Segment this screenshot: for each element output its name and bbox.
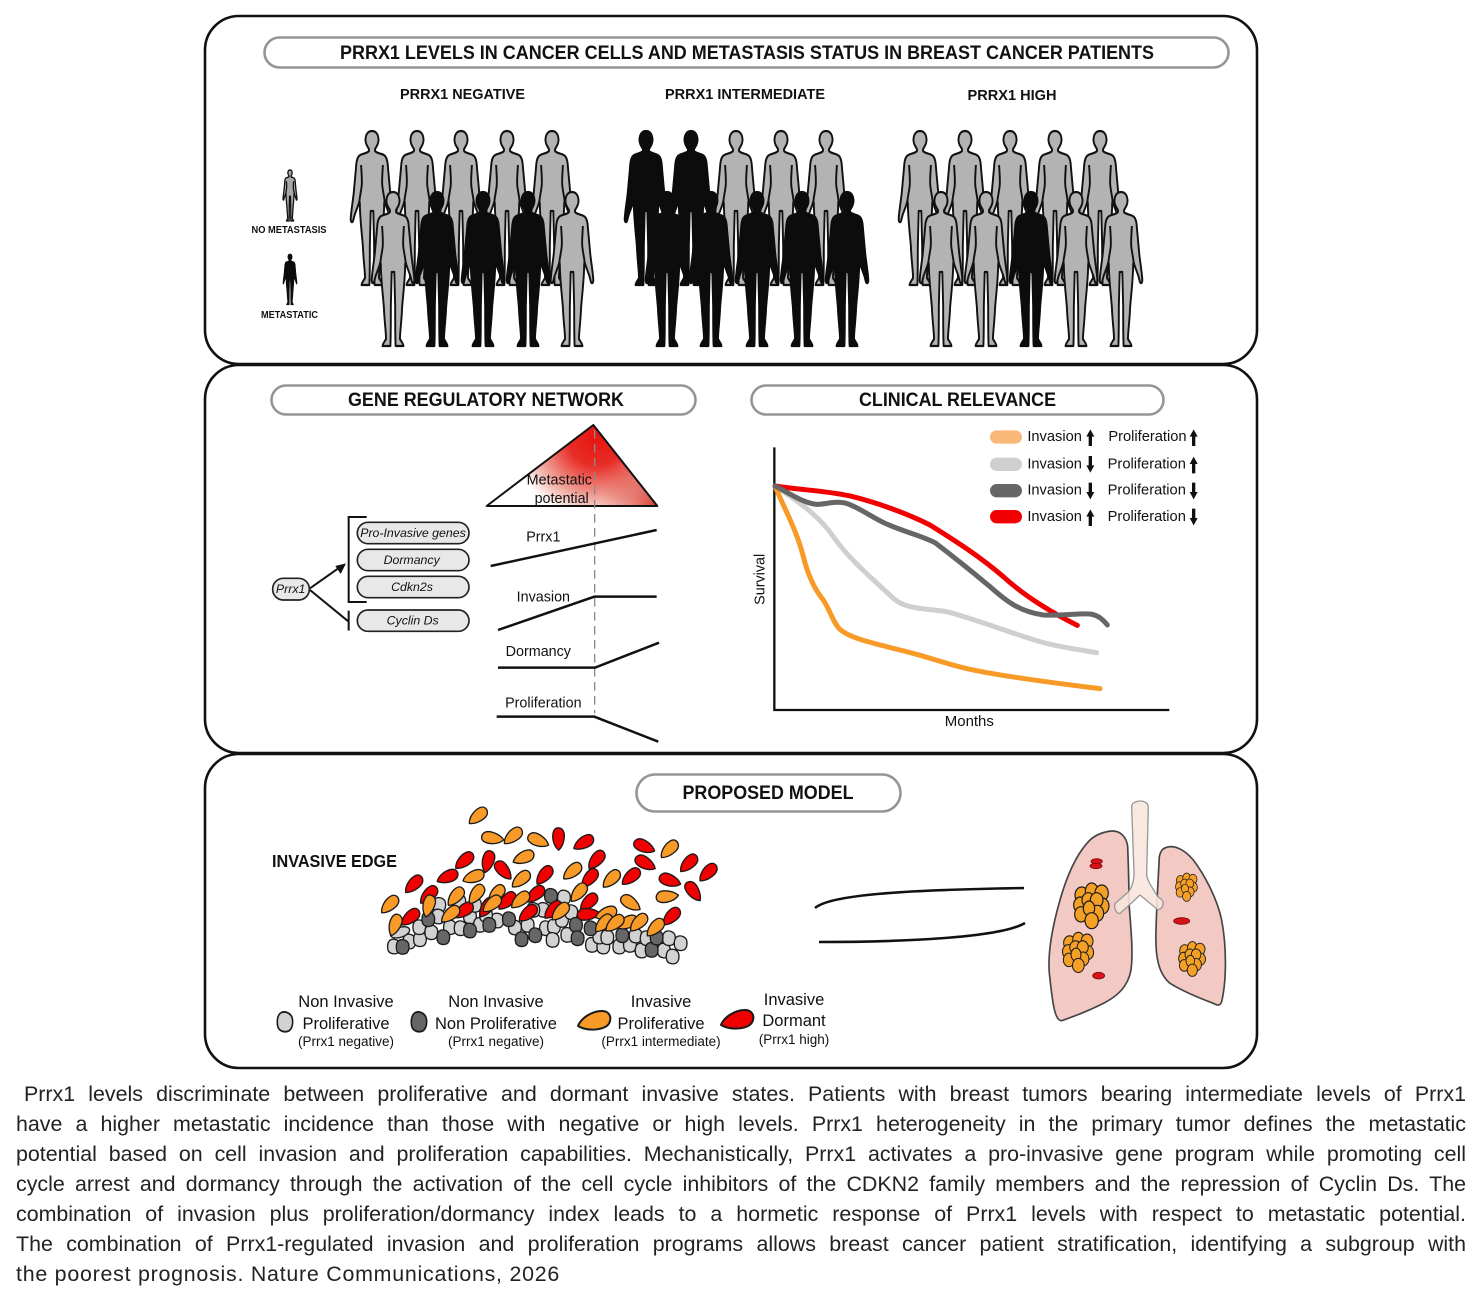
legend: invasive dormant: Invasive [764, 991, 824, 1009]
trend: invasion [498, 589, 657, 630]
caption text block [16, 1082, 1466, 1286]
gene pill: Cyclin Ds [357, 610, 469, 631]
column heading: PRRX1 negative: PRRX1 NEGATIVE [400, 86, 525, 103]
chart legend: Proliferation [1108, 509, 1186, 525]
survival chart [752, 429, 1198, 730]
heading pill: PRRX1 levels: PRRX1 LEVELS IN CANCER CELLS AND METASTASIS STATUS IN BREAST CANCER PATIENTS [340, 43, 1154, 64]
trend: proliferation: Proliferation [505, 695, 582, 711]
gene pill: pro-invasive genes: Pro-Invasive genes [360, 526, 466, 540]
triangle: metastatic potential [487, 425, 657, 507]
trend: proliferation [497, 695, 658, 742]
legend: invasive dormant: (Prrx1 high) [759, 1032, 829, 1047]
heading pill: gene regulatory network: GENE REGULATORY NETWORK [348, 390, 624, 411]
panel: proposed model [205, 754, 1257, 1068]
node: Prrx1: Prrx1 [276, 582, 305, 596]
gene pill: Cyclin Ds: Cyclin Ds [387, 614, 439, 628]
red metastases [1090, 859, 1190, 979]
legend: invasive proliferative: Invasive [631, 993, 691, 1011]
chart legend: Invasion [1027, 429, 1082, 445]
heading pill: proposed model: PROPOSED MODEL [682, 783, 854, 804]
heading pill: clinical relevance [752, 386, 1164, 414]
triangle: metastatic potential: Metastatic [527, 473, 592, 489]
caption text block: The combination of Prrx1-regulated invasion and proliferation programs allows breast cancer patient stratification, identifying a subgroup with [16, 1232, 1466, 1256]
legend: no metastasis vs metastatic: METASTATIC [261, 310, 318, 321]
panel: gene regulatory network and clinical relevance [205, 365, 1257, 753]
chart legend [990, 429, 1198, 526]
legend: no metastasis vs metastatic [252, 170, 327, 321]
legend: non invasive non proliferative: Non Proliferative [435, 1015, 557, 1033]
chart legend: Proliferation [1108, 456, 1186, 472]
curve: red [775, 486, 1077, 625]
legend: non invasive proliferative: Proliferative [302, 1015, 390, 1033]
heading pill: gene regulatory network [272, 386, 696, 414]
lungs with metastases [1049, 801, 1225, 1021]
column heading: PRRX1 intermediate: PRRX1 INTERMEDIATE [665, 86, 825, 103]
heading pill: clinical relevance: CLINICAL RELEVANCE [859, 390, 1056, 411]
chart legend: Invasion [1027, 456, 1082, 472]
curve: dark grey [775, 486, 1107, 625]
heading pill: PRRX1 levels [264, 38, 1228, 68]
patient group: PRRX1 high [899, 131, 1142, 346]
patient group: PRRX1 negative [351, 131, 593, 346]
trend: dormancy: Dormancy [506, 644, 572, 660]
legend: non invasive non proliferative [411, 993, 557, 1049]
column heading: PRRX1 high: PRRX1 HIGH [968, 87, 1056, 104]
heading pill: proposed model [636, 774, 900, 812]
gene pill: Cdkn2s: Cdkn2s [391, 580, 433, 594]
curve: orange [775, 486, 1100, 689]
legend: non invasive proliferative: Non Invasive [298, 993, 394, 1011]
triangle: metastatic potential: potential [535, 491, 589, 507]
curve: light grey [775, 486, 1097, 653]
gene network diagram [273, 425, 659, 742]
chart axes [774, 447, 1169, 710]
axis label: survival: Survival [752, 554, 768, 605]
gene pill: Cdkn2s [357, 576, 469, 598]
chart legend: Proliferation [1108, 429, 1187, 445]
chart legend: Invasion [1027, 509, 1082, 525]
patient group: PRRX1 intermediate [625, 131, 868, 346]
chart legend: Invasion [1027, 483, 1082, 499]
left lung [1049, 831, 1132, 1021]
caption text block: potential based on cell invasion and proliferation capabilities. Mechanistically, Prrx1 activates a pro-invasive gene program while promoting cell [16, 1142, 1466, 1166]
chart legend: Proliferation [1108, 483, 1186, 499]
invasive dormant cells [398, 827, 720, 927]
trend: dormancy [498, 643, 659, 668]
axis label: months: Months [945, 713, 994, 730]
caption text block: have a higher metastatic incidence than those with negative or high levels. Prrx1 heterogeneity in the primary tumor defines the metastatic [16, 1112, 1466, 1136]
legend: invasive proliferative [578, 993, 721, 1049]
legend: no metastasis vs metastatic: NO METASTASIS [252, 225, 327, 236]
activation arrow and bracket [310, 517, 367, 602]
node: Prrx1 [273, 578, 309, 600]
tumour invasive edge cell cluster [377, 805, 720, 964]
trend: invasion: Invasion [517, 589, 570, 605]
trachea and bronchi [1115, 801, 1163, 913]
inhibition line [310, 590, 349, 631]
right lung [1156, 847, 1225, 1005]
connector lines to lungs [815, 888, 1025, 942]
trend: Prrx1: Prrx1 [526, 529, 560, 545]
legend: invasive dormant [721, 991, 829, 1047]
caption text block: combination of invasion plus proliferation/dormancy index leads to a hormetic response of Prrx1 levels with respect to metastatic potential. [16, 1202, 1466, 1226]
caption text block: the poorest prognosis. Nature Communications, 2026 [16, 1262, 560, 1286]
caption text block: cycle arrest and dormancy through the activation of the cell cycle inhibitors of the CDKN2 family members and the repression of Cyclin Ds. The [16, 1172, 1466, 1196]
gene pill: pro-invasive genes [357, 522, 469, 544]
gene pill: dormancy [357, 549, 469, 571]
orange metastases [1062, 873, 1206, 976]
non-invasive cells [388, 890, 687, 964]
caption text block: Prrx1 levels discriminate between proliferative and dormant invasive states. Patients with breast tumors bearing intermediate levels of Prrx1 [24, 1082, 1466, 1106]
non-invasive non-proliferative cells [396, 889, 663, 957]
gene pill: dormancy: Dormancy [384, 553, 441, 567]
panel: PRRX1 levels and metastasis status [205, 16, 1257, 364]
legend: invasive proliferative: (Prrx1 intermediate) [601, 1034, 721, 1049]
legend: non invasive proliferative: (Prrx1 negative) [298, 1034, 394, 1049]
legend: invasive proliferative: Proliferative [617, 1015, 705, 1033]
trend: Prrx1 [491, 529, 657, 566]
invasive proliferative cells [377, 805, 681, 938]
legend: non invasive non proliferative: Non Invasive [448, 993, 544, 1011]
label: invasive edge: INVASIVE EDGE [272, 851, 397, 871]
legend: invasive dormant: Dormant [762, 1012, 826, 1030]
legend: non invasive proliferative [277, 993, 394, 1049]
legend: non invasive non proliferative: (Prrx1 negative) [448, 1034, 544, 1049]
